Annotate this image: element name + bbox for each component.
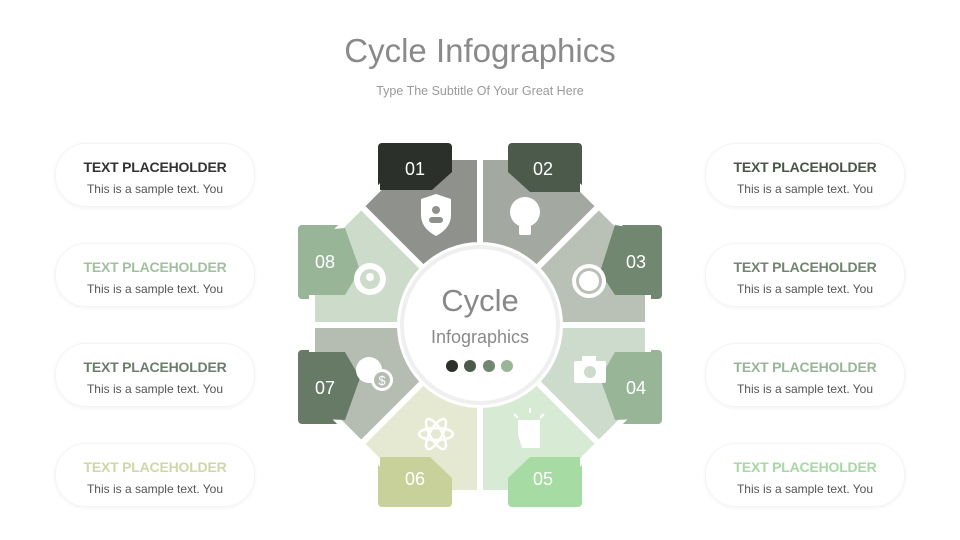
numbers: 07: [315, 378, 335, 398]
text box 3: This is a sample text. You: [737, 282, 873, 296]
text box 5: [705, 443, 905, 507]
center circle: Cycle: [441, 283, 519, 318]
text box 1: [55, 143, 255, 207]
text box 8: TEXT PLACEHOLDER: [83, 259, 227, 275]
text box 6: TEXT PLACEHOLDER: [83, 459, 227, 475]
text box 5: This is a sample text. You: [737, 482, 873, 496]
numbers: 01: [405, 159, 425, 179]
numbers: 02: [533, 159, 553, 179]
numbers: [315, 159, 646, 489]
text box 6: [55, 443, 255, 507]
text box 8: [55, 243, 255, 307]
text box 2: TEXT PLACEHOLDER: [733, 159, 877, 175]
subtitle: Type The Subtitle Of Your Great Here: [376, 84, 584, 98]
numbers: 08: [315, 252, 335, 272]
text box 1: This is a sample text. You: [87, 182, 223, 196]
center circle: [402, 247, 558, 403]
icons: $: [378, 373, 386, 388]
number tabs: [298, 143, 662, 507]
text box 2: This is a sample text. You: [737, 182, 873, 196]
text box 7: This is a sample text. You: [87, 382, 223, 396]
numbers: 05: [533, 469, 553, 489]
icons: [354, 194, 606, 452]
wedges: [312, 157, 648, 493]
text box 4: This is a sample text. You: [737, 382, 873, 396]
text box 3: TEXT PLACEHOLDER: [733, 259, 877, 275]
numbers: 06: [405, 469, 425, 489]
text box 7: TEXT PLACEHOLDER: [83, 359, 227, 375]
text box 5: TEXT PLACEHOLDER: [733, 459, 877, 475]
text box 8: This is a sample text. You: [87, 282, 223, 296]
text box 2: [705, 143, 905, 207]
text box 4: [705, 343, 905, 407]
tab fronts over wedges: [300, 150, 660, 500]
numbers: 03: [626, 252, 646, 272]
title: Cycle Infographics: [344, 32, 616, 69]
text box 4: TEXT PLACEHOLDER: [733, 359, 877, 375]
text box 6: This is a sample text. You: [87, 482, 223, 496]
text box 3: [705, 243, 905, 307]
numbers: 04: [626, 378, 646, 398]
center circle: Infographics: [431, 327, 529, 347]
text box 7: [55, 343, 255, 407]
text box 1: TEXT PLACEHOLDER: [83, 159, 227, 175]
